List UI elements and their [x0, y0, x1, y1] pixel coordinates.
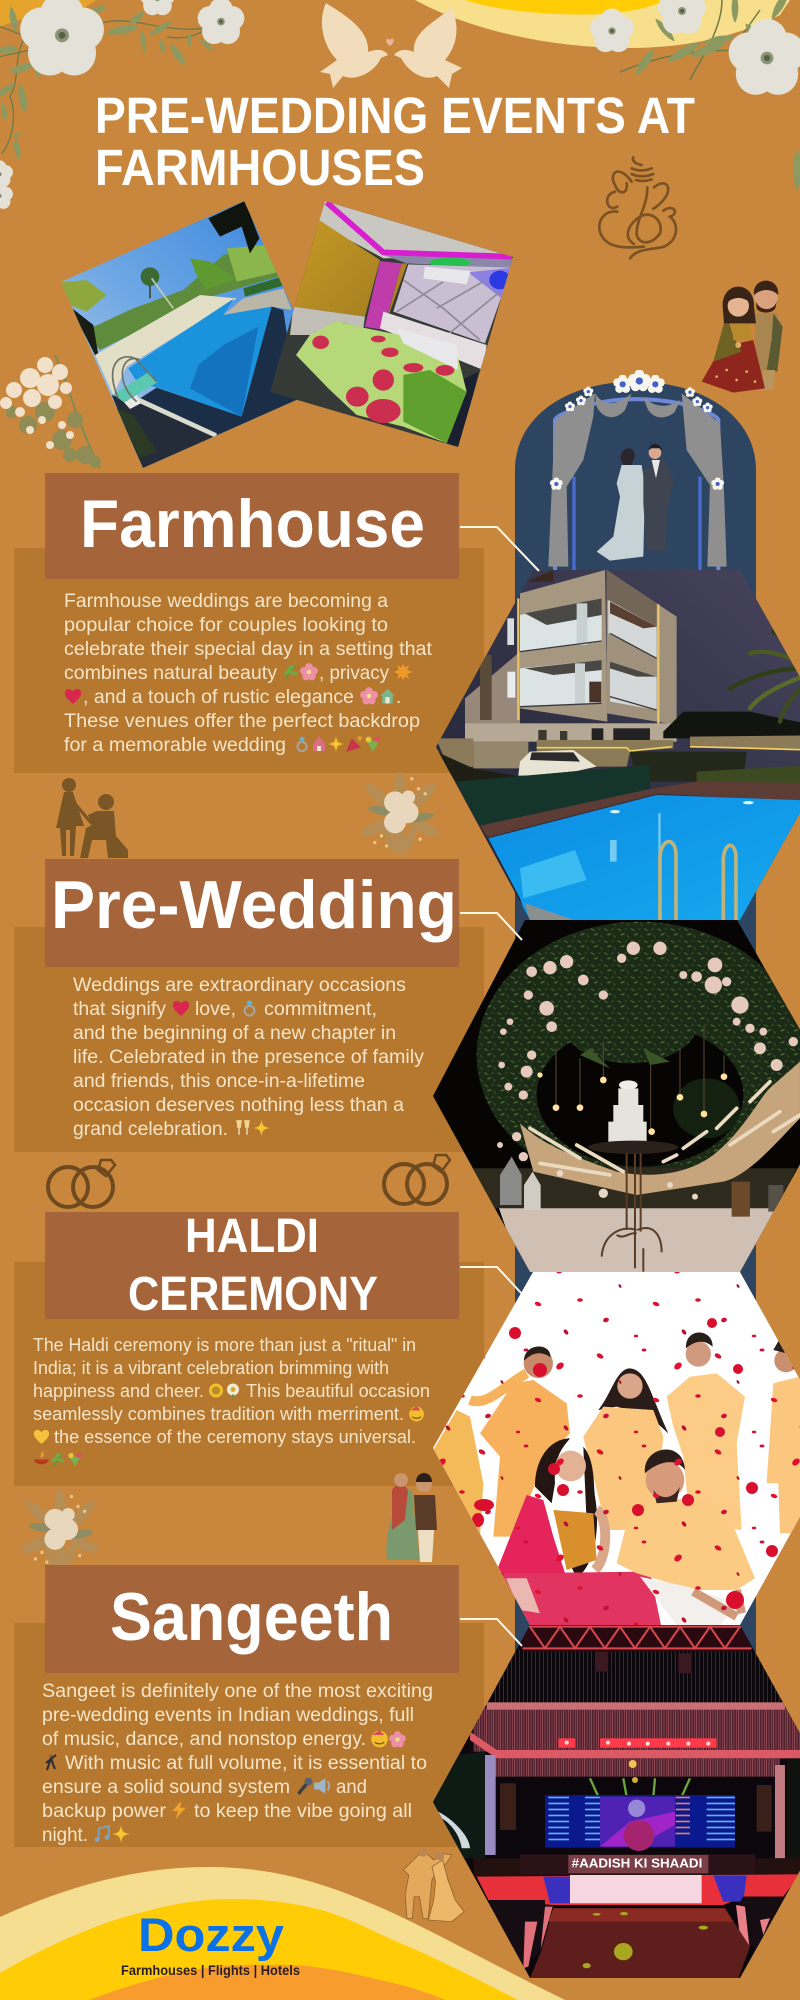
connector: sangeeth [460, 1619, 522, 1646]
logo: Dozzy: Farmhouses | Flights | Hotels [121, 1962, 300, 1978]
text block: farmhouse: for a memorable wedding [64, 735, 286, 756]
text block: sangeeth [42, 1681, 433, 1846]
text block: haldi [33, 1335, 430, 1466]
top sun swoosh [415, 0, 790, 48]
connector: haldi [460, 1267, 522, 1294]
panel: pre-wedding text background [14, 927, 484, 1152]
icon: couple illustration [702, 281, 783, 393]
text block: farmhouse: , privacy [319, 663, 389, 684]
panel: farmhouse text background [14, 548, 484, 773]
text block: pre-wedding [73, 975, 425, 1140]
text block: pre-wedding: occasion deserves nothing less than a [73, 1095, 404, 1116]
photo: farmhouse hexagon [430, 565, 800, 928]
text block: pre-wedding: Weddings are extraordinary occasions [73, 975, 406, 996]
floral corner: top left [0, 0, 244, 209]
panel: sangeeth text background [14, 1623, 484, 1847]
section: farmhouse heading [45, 473, 459, 579]
floral corner: top right [590, 0, 800, 191]
photo: sangeeth hexagon [430, 1625, 800, 1988]
text block: pre-wedding: grand celebration. [73, 1119, 228, 1140]
icon: proposal silhouette [56, 778, 128, 858]
text block: sangeeth: night. [42, 1825, 88, 1846]
section: farmhouse heading: Farmhouse [80, 486, 425, 562]
text block: farmhouse: , and a touch of rustic elegance [83, 687, 354, 708]
title: PRE-WEDDING EVENTS AT [95, 87, 695, 144]
text block: farmhouse: These venues offer the perfect backdrop [64, 711, 420, 732]
photo: sangeeth hexagon: #AADISH KI SHAADI [572, 1856, 702, 1871]
arch with couple [515, 369, 756, 1790]
text block: farmhouse: combines natural beauty [64, 663, 278, 684]
icon: white flower cluster [0, 355, 101, 468]
text block: haldi: happiness and cheer. [33, 1381, 204, 1401]
photo: bedroom [267, 198, 517, 452]
text block: sangeeth: pre-wedding events in Indian weddings, full [42, 1705, 414, 1726]
doves [320, 3, 462, 88]
text block: pre-wedding: love, [195, 999, 236, 1020]
icon: small couple [386, 1473, 437, 1562]
panel: haldi text background [14, 1262, 484, 1486]
logo: Dozzy: Dozzy [138, 1908, 284, 1961]
section: haldi heading: HALDI [185, 1210, 319, 1263]
section: haldi heading: CEREMONY [128, 1268, 378, 1321]
section: sangeeth heading [45, 1565, 459, 1673]
text block: farmhouse: celebrate their special day in a setting that [64, 639, 433, 660]
text block: sangeeth: Sangeet is definitely one of the most exciting [42, 1681, 433, 1702]
text block: sangeeth: backup power [42, 1801, 167, 1822]
text block: pre-wedding: commitment, [264, 999, 377, 1020]
section: haldi heading [45, 1210, 459, 1321]
icon: ganesha [599, 157, 676, 258]
text block: haldi: the essence of the ceremony stays universal. [54, 1427, 416, 1447]
icon: rings right [384, 1155, 450, 1204]
icon: rings left [48, 1160, 115, 1207]
text block: sangeeth: and [336, 1777, 367, 1798]
text block: pre-wedding: that signify [73, 999, 167, 1020]
title [95, 87, 695, 196]
text block: pre-wedding: and friends, this once-in-a-lifetime [73, 1071, 365, 1092]
title: FARMHOUSES [95, 139, 425, 196]
bottom waves [0, 1867, 565, 2000]
text block: haldi: The Haldi ceremony is more than just a "ritual" in [33, 1335, 416, 1355]
connector: farmhouse [460, 527, 539, 571]
section: pre-wedding heading [45, 859, 459, 967]
photo: pool [61, 201, 297, 468]
text block: sangeeth: ensure a solid sound system [42, 1777, 290, 1798]
text block: sangeeth: With music at full volume, it is essential to [65, 1753, 427, 1774]
section: pre-wedding heading: Pre-Wedding [51, 867, 457, 943]
icon: bouquet upper [359, 772, 441, 856]
text block: haldi: India; it is a vibrant celebration brimming with [33, 1358, 389, 1378]
text block: haldi: seamlessly combines tradition with merriment. [33, 1404, 404, 1424]
text block: pre-wedding: life. Celebrated in the presence of family [73, 1047, 425, 1068]
icon: dancing couple [403, 1849, 464, 1922]
photo: pre-wedding hexagon [430, 915, 800, 1278]
icon: bouquet lower [20, 1490, 100, 1572]
text block: pre-wedding: and the beginning of a new chapter in [73, 1023, 396, 1044]
text block: farmhouse [64, 591, 433, 756]
logo: Dozzy [121, 1908, 300, 1978]
photo: haldi hexagon [430, 1268, 800, 1628]
text block: farmhouse: . [396, 687, 401, 708]
text block: haldi: This beautiful occasion [246, 1381, 430, 1401]
section: sangeeth heading: Sangeeth [110, 1579, 393, 1655]
connector: pre-wedding [460, 913, 522, 940]
text block: farmhouse: Farmhouse weddings are becoming a [64, 591, 388, 612]
text block: farmhouse: popular choice for couples looking to [64, 615, 388, 636]
text block: sangeeth: to keep the vibe going all [194, 1801, 412, 1822]
text block: sangeeth: of music, dance, and nonstop energy. [42, 1729, 366, 1750]
